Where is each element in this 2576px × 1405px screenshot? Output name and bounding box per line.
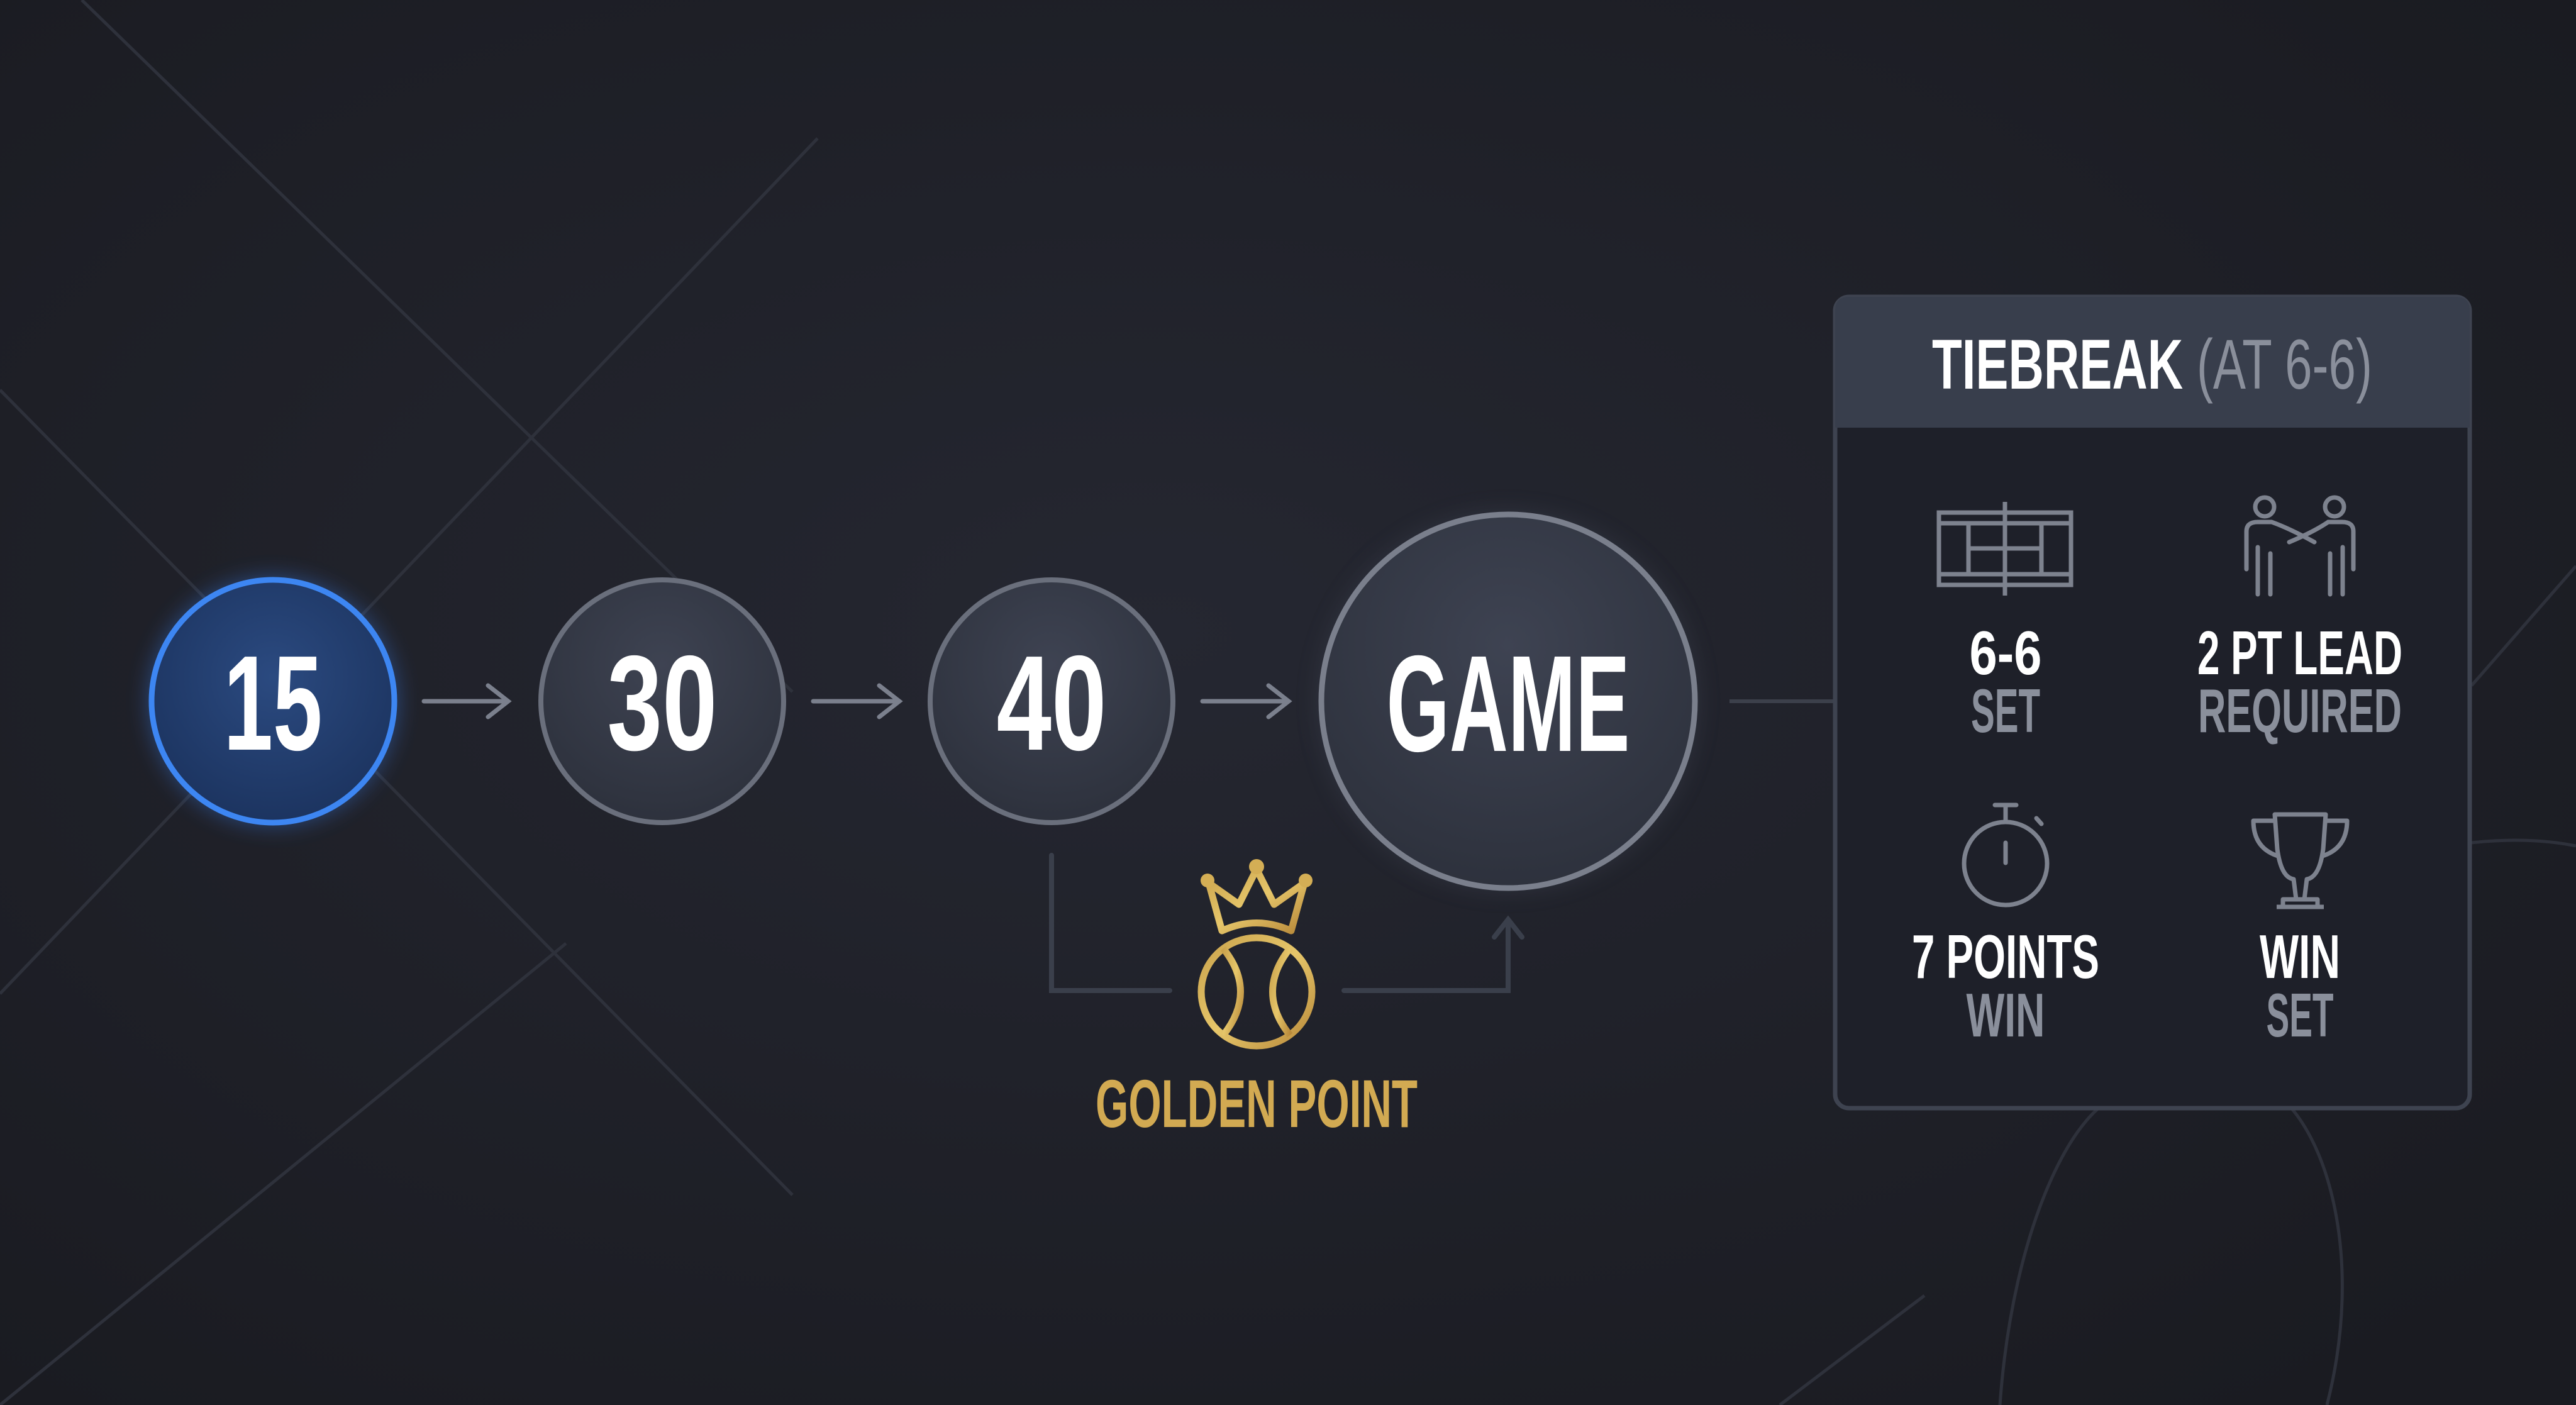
item: win set: WIN (2260, 922, 2340, 991)
item: win set: SET (2267, 980, 2333, 1050)
item: 6-6 set (1939, 502, 2071, 745)
circle: 15 (150, 578, 396, 825)
panel header (1835, 297, 2470, 428)
item: win set (2253, 814, 2347, 1050)
circle: 40 (930, 580, 1173, 823)
label: GOLDEN POINT: GOLDEN POINT (1096, 1065, 1418, 1141)
panel: tiebreak (1835, 297, 2470, 1108)
panel header: TIEBREAK (AT 6-6) (1932, 325, 2372, 404)
connector line to tiebreak (1729, 699, 1833, 703)
icon: crowned tennis ball (1201, 859, 1313, 1046)
circle: 30: 30 (608, 627, 717, 779)
arrow 2 (813, 686, 899, 717)
circle: 40: 40 (996, 627, 1107, 779)
item: 6-6 set: 6-6 (1970, 618, 2041, 687)
item: 7 points win: 7 POINTS (1912, 922, 2099, 991)
item: 7 points win: WIN (1966, 980, 2045, 1050)
item: 2 pt lead required: REQUIRED (2198, 676, 2402, 745)
arrow 3 (1202, 686, 1289, 717)
circle: GAME (1319, 513, 1697, 890)
item: 2 pt lead required (2197, 497, 2402, 745)
item: 7 points win (1912, 805, 2099, 1050)
item: 6-6 set: SET (1971, 676, 2040, 745)
arrow 1 (424, 686, 508, 717)
golden point bracket arrow (1052, 855, 1522, 991)
circle: GAME: GAME (1386, 628, 1630, 780)
circle: 15: 15 (224, 627, 322, 779)
circle: 30 (541, 580, 784, 823)
item: 2 pt lead required: 2 PT LEAD (2197, 618, 2402, 687)
